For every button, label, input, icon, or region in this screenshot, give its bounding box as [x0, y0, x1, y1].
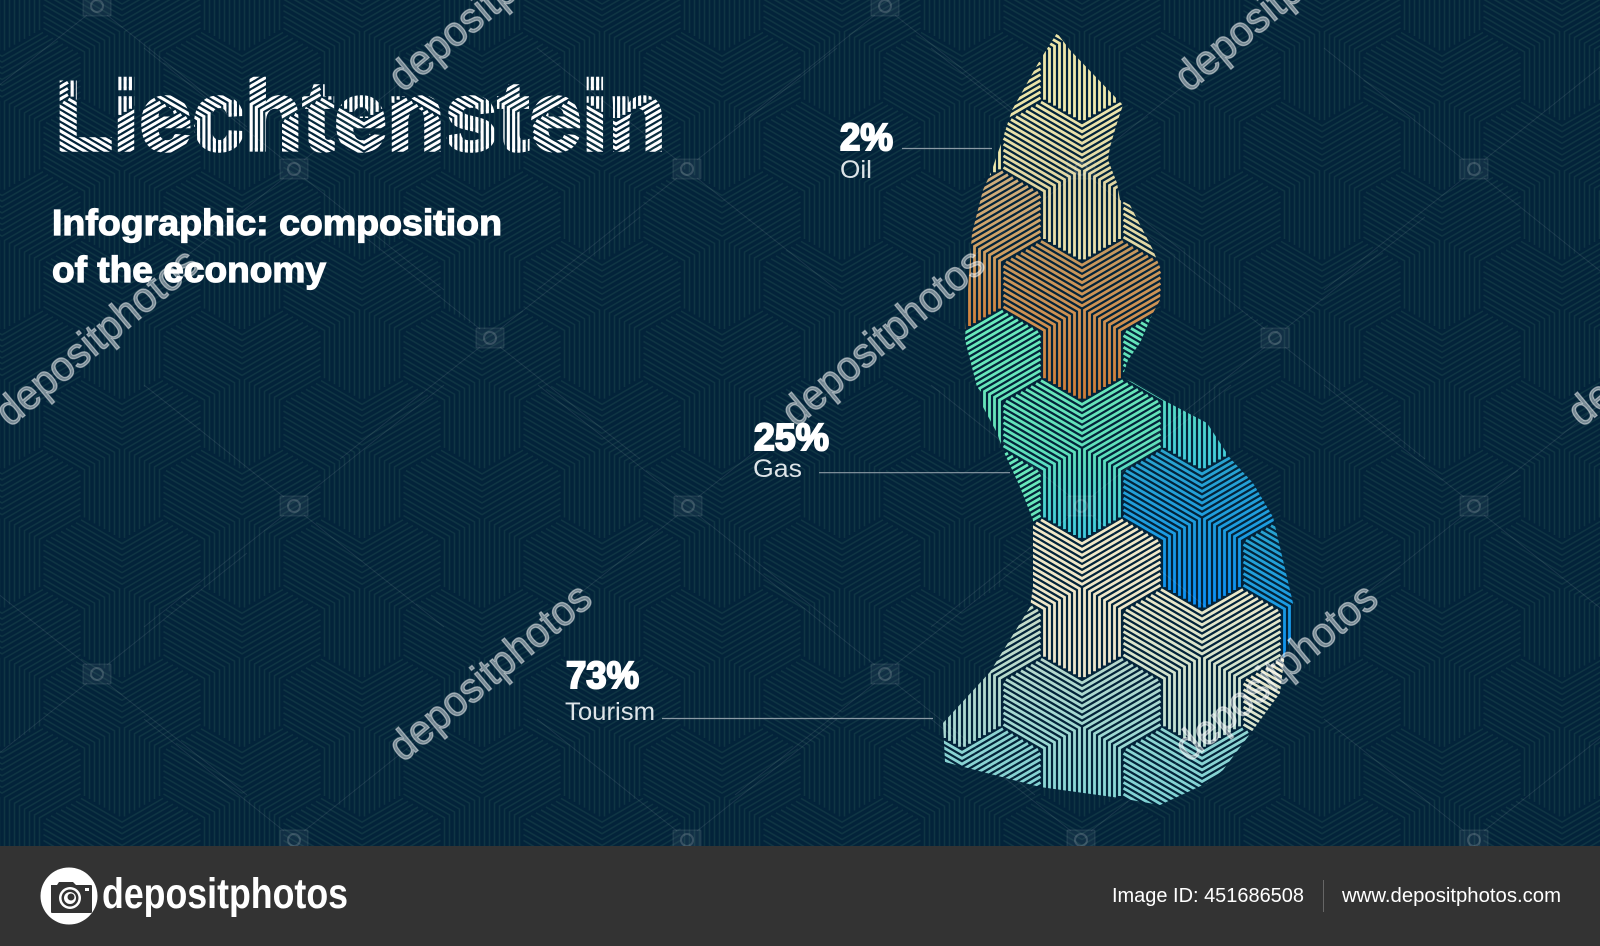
website: www.depositphotos.com: [1341, 885, 1561, 907]
callout: oil: 2%: [840, 117, 893, 159]
subtitle: [52, 202, 502, 290]
footer bar: [0, 846, 1600, 946]
watermark: depositphotos text: depositphotos: [772, 238, 993, 435]
subtitle: Infographic: composition: [52, 202, 502, 243]
image id: Image ID: 451686508: [1112, 885, 1304, 907]
callout: oil: Oil: [840, 156, 872, 184]
callout: gas: 25%: [754, 417, 829, 459]
watermark: depositphotos text: depositphotos: [1165, 573, 1386, 770]
callout: tourism: [565, 655, 933, 726]
watermark: depositphotos text: depositphotos: [379, 573, 600, 770]
map of Liechtenstein: [943, 34, 1293, 805]
logo wordmark: depositphotos: [102, 870, 348, 918]
callout: gas: [753, 417, 1010, 483]
title: Liechtenstein: [55, 61, 666, 171]
callout: tourism: 73%: [566, 655, 639, 697]
callout: oil: [840, 117, 992, 184]
callout: gas: Gas: [753, 455, 802, 483]
subtitle: of the economy: [52, 249, 326, 290]
icon: depositphotos camera logo: [40, 868, 98, 924]
callout: tourism: Tourism: [565, 698, 655, 726]
